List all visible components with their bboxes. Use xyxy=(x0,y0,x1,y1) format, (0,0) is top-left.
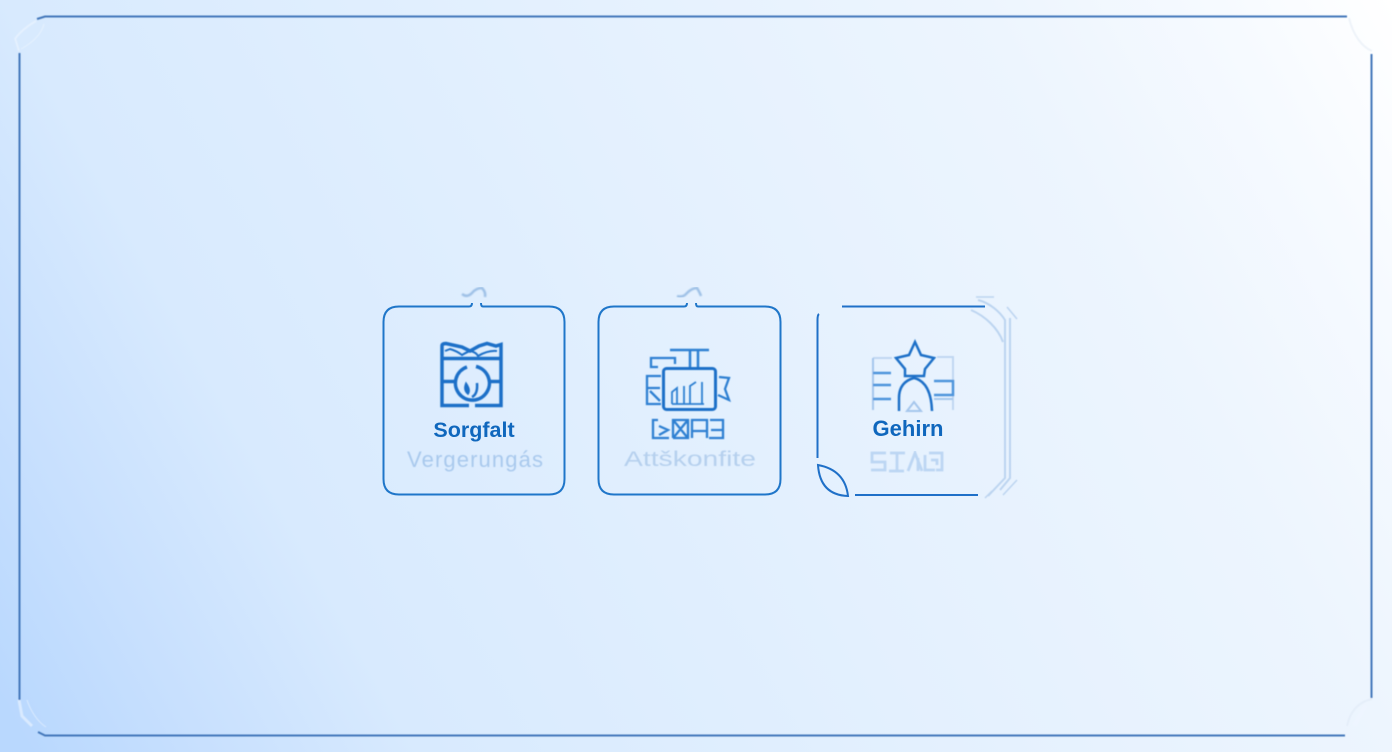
label: Vergerungás: Vergerungás xyxy=(407,447,543,472)
card 3 outline segments xyxy=(818,306,985,495)
glyph row xyxy=(871,453,942,471)
card 1 notch ornament xyxy=(462,288,485,297)
icon: corner leaf xyxy=(818,465,848,496)
right ornament xyxy=(971,297,1017,498)
glyph row xyxy=(653,420,723,438)
card 3: Gehirn xyxy=(818,297,1017,498)
card 2 outline xyxy=(598,303,780,494)
card 2 notch ornament xyxy=(677,288,701,297)
icon: star and building xyxy=(873,342,954,411)
card 2: Attškonfite xyxy=(598,288,780,494)
heading: Gehirn: Gehirn xyxy=(873,416,943,441)
card 1: Sorgfalt xyxy=(384,288,564,494)
heading: Sorgfalt: Sorgfalt xyxy=(433,418,515,442)
label: Attškonfite: Attškonfite xyxy=(624,448,756,471)
icon: monitor with chart xyxy=(647,350,729,410)
card 1 outline xyxy=(384,303,564,494)
icon: washing machine xyxy=(442,344,501,406)
